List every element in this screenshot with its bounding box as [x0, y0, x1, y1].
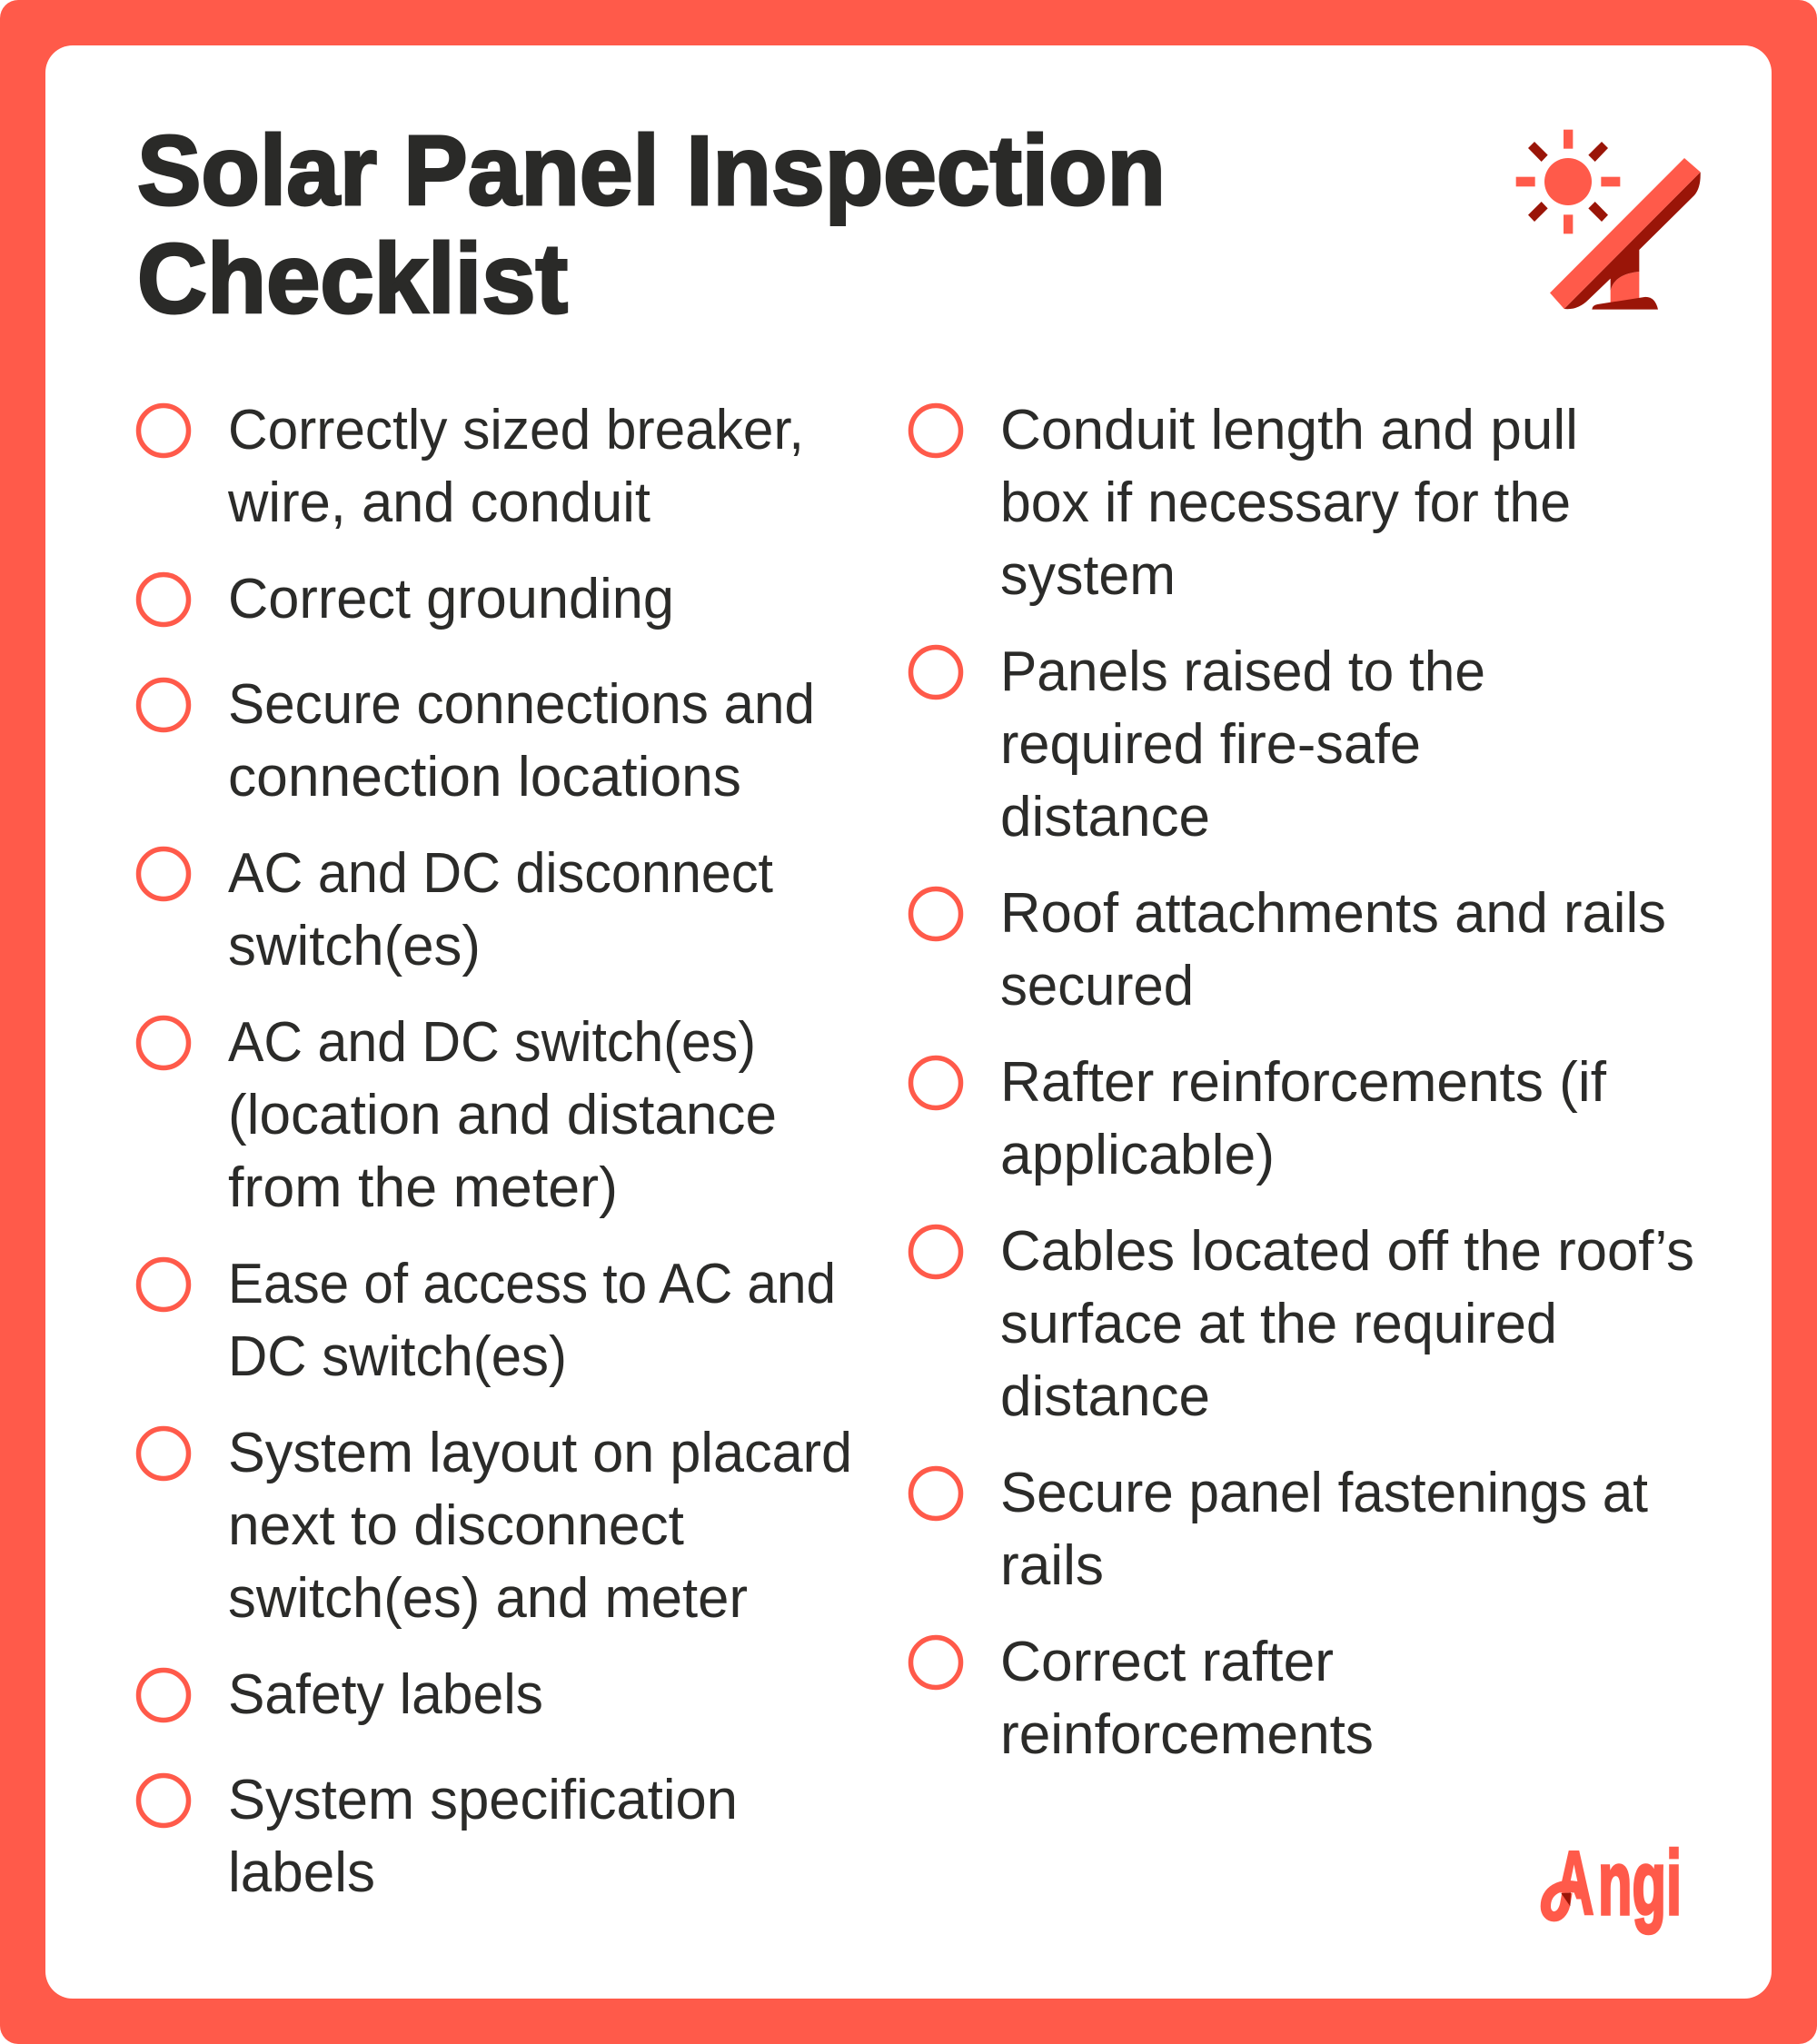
item: panel fastenings: [910, 1462, 1648, 1597]
item: secure connections: [138, 673, 815, 809]
item: ease of access: DC switch(es): [228, 1325, 567, 1388]
item: conduit length: [910, 399, 1578, 607]
item: correct rafter reinforcements: Correct rafter: [1000, 1631, 1334, 1693]
item: AC and DC switch location: (location and distance: [228, 1084, 777, 1146]
item: correctly sized breaker: wire, and conduit: [227, 471, 650, 534]
item: correct rafter reinforcements: [910, 1631, 1374, 1766]
left checklist column: [138, 399, 852, 1904]
icon: sun and solar panel: [1516, 130, 1701, 310]
item: rafter reinforcements: applicable): [1000, 1124, 1275, 1186]
item: panels raised: distance: [1000, 786, 1210, 848]
item: roof attachments: [910, 882, 1666, 1017]
item: cables off the roof: surface at the required: [1000, 1293, 1557, 1355]
item: secure connections: connection locations: [228, 746, 741, 809]
logo: Angi: A: [1554, 1832, 1594, 1934]
item: safety labels: Safety labels: [228, 1663, 543, 1726]
item: AC and DC disconnect: AC and DC disconnect: [228, 842, 773, 905]
item: correctly sized breaker: [138, 399, 804, 534]
item: system layout on placard: [138, 1422, 852, 1630]
item: system specification labels: labels: [228, 1841, 375, 1904]
item: panels raised: [910, 640, 1485, 848]
item: correctly sized breaker: Correctly sized breaker,: [228, 399, 804, 461]
right checklist column: [910, 399, 1694, 1766]
title: Checklist: [137, 223, 568, 334]
item: panels raised: Panels raised to the: [1000, 640, 1485, 703]
item: system layout on placard: switch(es) and meter: [228, 1567, 748, 1630]
item: rafter reinforcements: [910, 1051, 1607, 1186]
item: AC and DC switch location: from the meter): [228, 1156, 618, 1219]
item: cables off the roof: distance: [1000, 1365, 1210, 1428]
item: ease of access: [138, 1253, 836, 1388]
item: system layout on placard: System layout on placard: [228, 1422, 852, 1484]
item: AC and DC switch location: [138, 1011, 777, 1219]
item: AC and DC disconnect: [138, 842, 773, 977]
item: roof attachments: Roof attachments and rails: [1000, 882, 1666, 945]
logo: Angi: ngi: [1598, 1832, 1682, 1934]
item: secure connections: Secure connections and: [228, 673, 815, 736]
item: ease of access: Ease of access to AC and: [228, 1253, 836, 1315]
item: conduit length: Conduit length and pull: [1000, 399, 1578, 461]
item: cables off the roof: Cables located off the roof’s: [1000, 1220, 1694, 1283]
item: roof attachments: secured: [1000, 955, 1194, 1017]
item: conduit length: system: [1000, 544, 1176, 607]
item: AC and DC switch location: AC and DC switch(es): [228, 1011, 756, 1074]
item: rafter reinforcements: Rafter reinforcements (if: [1000, 1051, 1607, 1114]
logo: Angi: [1542, 1832, 1682, 1934]
title: [137, 115, 1166, 334]
item: system layout on placard: next to disconnect: [228, 1494, 684, 1557]
title: Solar Panel Inspection: [137, 115, 1166, 226]
item: correct grounding: Correct grounding: [228, 568, 674, 630]
item: panel fastenings: Secure panel fastenings at: [1000, 1462, 1648, 1524]
item: system specification labels: [138, 1769, 738, 1904]
item: AC and DC disconnect: switch(es): [228, 915, 481, 977]
item: panel fastenings: rails: [1000, 1534, 1104, 1597]
item: cables off the roof: [910, 1220, 1694, 1428]
item: conduit length: box if necessary for the: [1000, 471, 1571, 534]
item: system specification labels: System specification: [228, 1769, 738, 1831]
item: panels raised: required fire-safe: [1000, 713, 1421, 776]
item: correct rafter reinforcements: reinforcements: [1000, 1703, 1374, 1766]
